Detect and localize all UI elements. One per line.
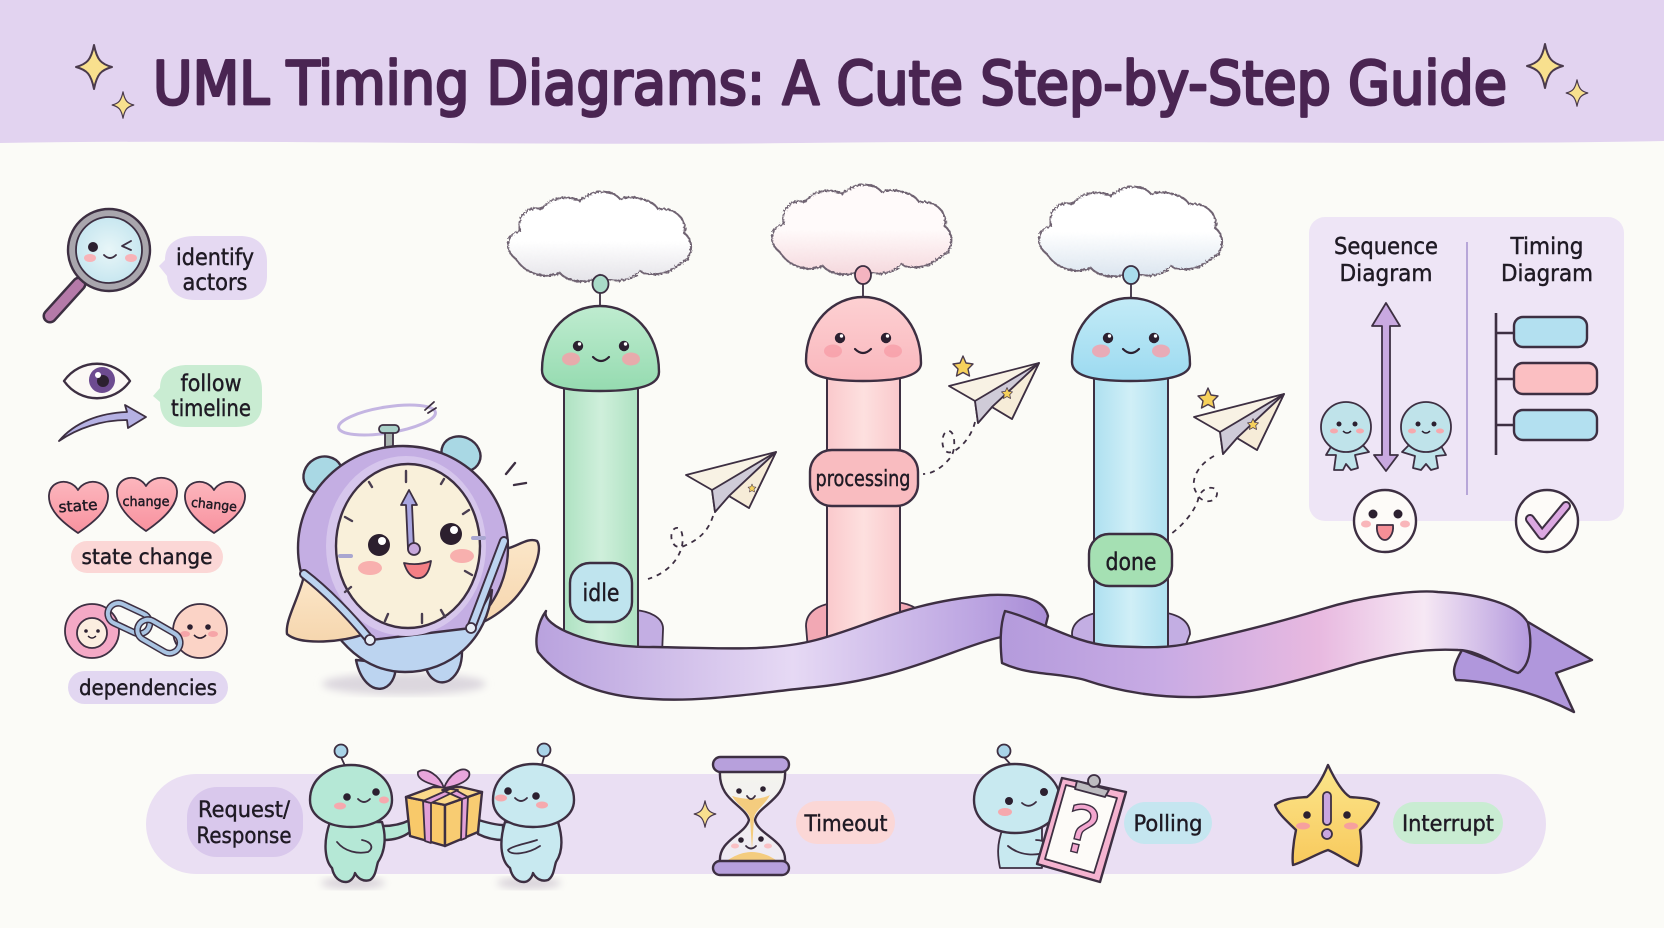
- face: [824, 333, 902, 358]
- face: [562, 341, 640, 366]
- icon: hourglass with sparkle: [694, 757, 789, 875]
- callout: follow timeline: [153, 365, 262, 427]
- callout: identify actors: identify: [176, 245, 254, 271]
- robot: [974, 744, 1060, 868]
- character: clock mascot: [287, 399, 539, 695]
- icon: eye: [64, 364, 130, 398]
- band background: [146, 774, 1546, 874]
- clock ticks: [340, 471, 484, 623]
- arrow: paper plane two: [923, 356, 1039, 474]
- lifeline: processing pillar: [772, 185, 951, 642]
- label: request response: Request/: [198, 798, 291, 823]
- shadow: [322, 673, 486, 695]
- panel: sequence vs timing comparison: [1309, 217, 1624, 552]
- state label: processing: processing: [816, 467, 910, 492]
- clock hand: [401, 490, 420, 555]
- heading: sequence diagram: Sequence: [1334, 234, 1438, 260]
- header band: [0, 0, 1664, 144]
- icon: title sparkles right: [1527, 44, 1588, 106]
- antenna: [592, 275, 608, 306]
- state label: done: done: [1106, 548, 1156, 576]
- cloud: [1039, 187, 1222, 277]
- head: [806, 297, 921, 381]
- heart: change: [185, 482, 245, 533]
- head: [1072, 298, 1190, 381]
- ribbon segment two: [1001, 592, 1530, 697]
- arrow: timeline: [59, 405, 146, 441]
- icon: robot with clipboard: [974, 744, 1126, 882]
- robot: blue: [478, 744, 574, 882]
- robot shadows: [321, 877, 561, 889]
- state label: done: [1089, 534, 1172, 586]
- character: right actor: [1401, 402, 1451, 470]
- gift box: [406, 769, 482, 846]
- ribbon timeline: [536, 592, 1592, 712]
- icon: state hearts: [49, 478, 245, 533]
- icon: title sparkles left: [76, 45, 134, 118]
- arrow: double headed: [1372, 303, 1400, 471]
- glass: [720, 771, 785, 862]
- heading: timing diagram: Diagram: [1501, 261, 1593, 287]
- overall straps: [304, 541, 504, 645]
- cloud: [772, 185, 951, 275]
- arm: right: [476, 540, 539, 625]
- label: polling: [1124, 802, 1212, 844]
- lifeline: done pillar: [1039, 187, 1222, 648]
- arrow: paper plane three: [1171, 388, 1284, 534]
- heading: timing diagram: [1501, 234, 1593, 287]
- chart: timing bars: [1496, 313, 1597, 455]
- state label: idle: idle: [582, 579, 620, 607]
- head: [542, 306, 659, 391]
- arrow: paper plane one: [648, 452, 776, 579]
- label: timeout: [796, 801, 895, 844]
- label: timeout: Timeout: [804, 812, 888, 837]
- icon: robots exchanging gift: [310, 744, 574, 889]
- callout: identify actors: [159, 236, 267, 300]
- clipboard: [1037, 775, 1126, 882]
- state label: idle: [570, 563, 632, 622]
- label: interrupt: [1393, 802, 1503, 844]
- clipboard: ?: [1055, 789, 1107, 872]
- icon: interrupt star: [1275, 765, 1379, 866]
- icon: check mark: [1516, 490, 1578, 552]
- clock face: [336, 464, 480, 628]
- label: interrupt: Interrupt: [1402, 812, 1494, 837]
- heart: change: [117, 478, 177, 531]
- clock face expression: [358, 523, 474, 578]
- label: state change: state change: [82, 545, 212, 569]
- sparkle: [694, 801, 716, 827]
- antenna: [855, 266, 871, 297]
- divider: [1466, 242, 1468, 495]
- cloud: [508, 192, 691, 282]
- heart: state: state: [58, 496, 98, 516]
- top cap: [713, 757, 789, 772]
- feet: [356, 652, 462, 689]
- icon: magnifying glass: [50, 209, 150, 316]
- heading: timing diagram: Timing: [1510, 234, 1584, 260]
- label: state change: [71, 541, 223, 573]
- character: left actor: [1321, 402, 1371, 470]
- heart: change: change: [122, 495, 170, 510]
- robot: green: [310, 744, 410, 882]
- heading: sequence diagram: Diagram: [1340, 261, 1432, 287]
- heart: state: [49, 482, 108, 533]
- sand: [725, 795, 778, 862]
- arm: left: [287, 576, 364, 642]
- callout: follow timeline: timeline: [171, 396, 251, 422]
- label: request response: [187, 787, 303, 857]
- panel: interaction patterns: [146, 744, 1546, 889]
- crank and halo: [337, 399, 437, 450]
- shaft: [1094, 370, 1168, 648]
- timeline: pillar bases behind ribbon: [620, 602, 1190, 655]
- bottom cap: [713, 861, 789, 875]
- label: polling: Polling: [1134, 812, 1202, 837]
- shaft: [564, 380, 638, 650]
- face: [1092, 333, 1170, 358]
- bells: [297, 430, 486, 501]
- overalls: [328, 590, 492, 672]
- antenna: [1123, 266, 1139, 298]
- callout: identify actors: actors: [182, 270, 248, 296]
- clock rim highlight: [326, 456, 486, 636]
- ribbon tail: [1454, 622, 1592, 712]
- state label: processing: [810, 450, 918, 506]
- label: dependencies: dependencies: [79, 676, 217, 700]
- panel: steps column: [49, 209, 267, 704]
- callout: follow timeline: follow: [180, 371, 242, 397]
- ribbon segment one: [536, 595, 1048, 700]
- motion marks: [506, 463, 526, 485]
- heart: change: change: [190, 496, 238, 515]
- faces: [731, 786, 772, 848]
- panel background: [1309, 217, 1624, 521]
- icon: happy face: [1354, 490, 1416, 552]
- title: UML Timing Diagrams: A Cute Step-by-Step Guide: [153, 49, 1507, 119]
- lifeline: idle pillar: [508, 192, 691, 650]
- shaft: [827, 370, 900, 642]
- label: dependencies: [68, 671, 228, 704]
- heading: sequence diagram: [1334, 234, 1438, 287]
- icon: linked dependencies: [65, 600, 227, 658]
- label: request response: Response: [196, 824, 292, 849]
- clock body: [298, 446, 508, 650]
